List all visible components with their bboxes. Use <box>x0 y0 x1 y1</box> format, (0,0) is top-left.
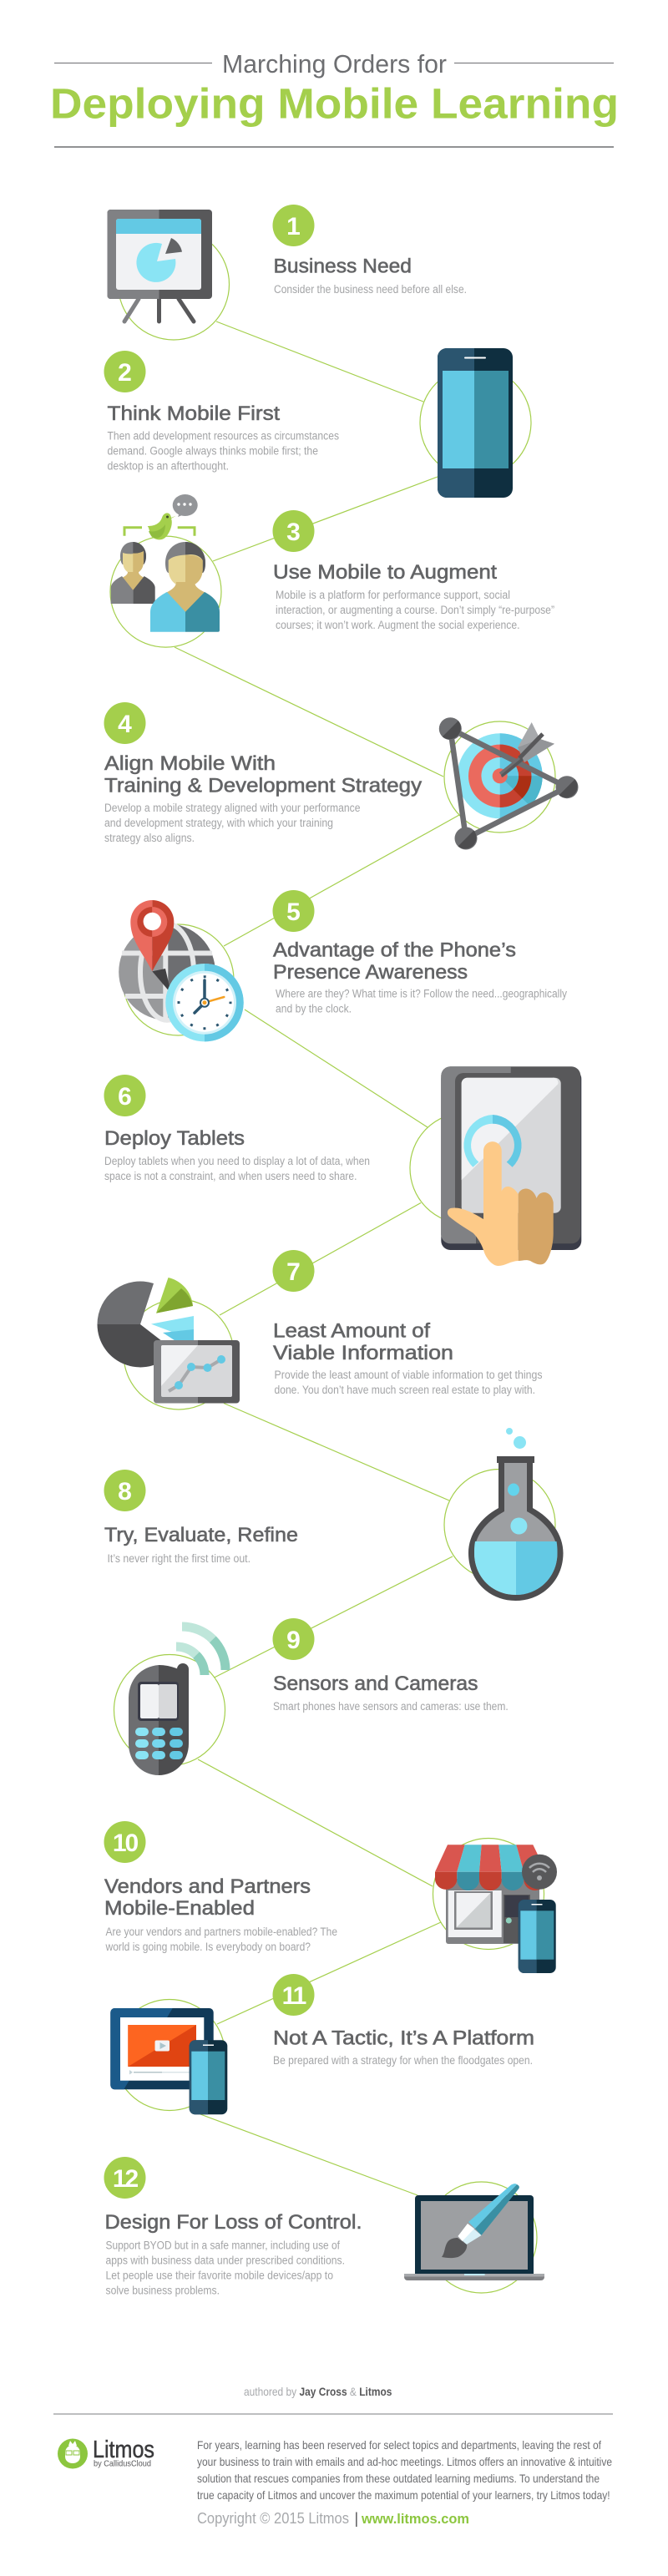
heading: Use Mobile to Augment <box>273 561 497 584</box>
icon: people and bird <box>110 494 221 647</box>
icon: presentation board <box>107 210 229 340</box>
icon: globe, pin and clock <box>119 900 244 1041</box>
description: Be prepared with a strategy for when the floodgates open. <box>273 2054 533 2067</box>
number 2: 2 <box>118 359 132 387</box>
description: Support BYOD but in a safe manner, including use of <box>105 2239 340 2251</box>
footer paragraph: true capacity of Litmos and uncover the maximum potential of your learners, try Litmos today! <box>197 2488 610 2502</box>
heading: Not A Tactic, It’s A Platform <box>273 2027 534 2050</box>
footer logo: litmos: by CallidusCloud <box>94 2458 151 2468</box>
item 5: presence awareness <box>119 890 567 1041</box>
description: demand. Google always thinks mobile first; the <box>107 444 318 458</box>
heading: Try, Evaluate, Refine <box>104 1524 298 1546</box>
description: desktop is an afterthought. <box>107 459 229 473</box>
number 10: 10 <box>113 1830 138 1857</box>
description: done. You don’t have much screen real estate to play with. <box>274 1384 535 1396</box>
copyright and website <box>197 2510 469 2527</box>
item 11: not a tactic <box>110 1974 534 2114</box>
item 2: think mobile first <box>104 348 531 498</box>
heading: Align Mobile With <box>104 752 276 775</box>
heading: Deploy Tablets <box>104 1127 245 1150</box>
number 1: 1 <box>286 213 301 240</box>
footer logo: litmos <box>58 2437 154 2468</box>
item 8: try, evaluate, refine <box>104 1428 563 1601</box>
number 5: 5 <box>286 898 301 926</box>
description <box>276 589 554 631</box>
item 9: sensors and cameras <box>114 1618 509 1775</box>
description: apps with business data under prescribed conditions. <box>105 2255 345 2266</box>
footer paragraph: solution that rescues companies from these outdated learning mediums. To understand the <box>197 2472 600 2485</box>
number 12 <box>104 2157 145 2199</box>
number 8: 8 <box>118 1478 132 1506</box>
description: Develop a mobile strategy aligned with your performance <box>104 802 361 814</box>
number 3: 3 <box>286 519 301 546</box>
title: deploying mobile learning: Deploying Mobile Learning <box>50 80 619 127</box>
item 6: deploy tablets <box>104 1066 581 1266</box>
description: Then add development resources as circumstances <box>107 429 339 443</box>
icon: laptop and brush <box>404 2182 544 2293</box>
heading: Business Need <box>274 256 412 277</box>
description: solve business problems. <box>105 2285 220 2296</box>
copyright and website: Copyright © 2015 Litmos <box>197 2510 349 2527</box>
heading <box>104 752 423 797</box>
icon: pie chart and mini tablet <box>97 1278 240 1409</box>
item 1: business need <box>107 205 467 340</box>
heading: Viable Information <box>273 1342 453 1364</box>
number 3 <box>272 510 314 552</box>
number 2 <box>104 351 145 392</box>
number 12: 12 <box>113 2165 138 2193</box>
description <box>107 429 339 473</box>
number 11 <box>272 1974 314 2016</box>
icon: tablet with hand <box>410 1066 581 1266</box>
footer logo: litmos: Litmos <box>93 2437 154 2463</box>
footer paragraph: your business to train with emails and ad-hoc meetings. Litmos offers an innovative & intuitive <box>197 2455 612 2468</box>
heading <box>273 939 516 984</box>
description <box>104 802 361 844</box>
description <box>104 1155 370 1182</box>
heading: Least Amount of <box>273 1319 430 1342</box>
heading: Sensors and Cameras <box>273 1673 478 1695</box>
description: Mobile is a platform for performance support, social <box>276 589 510 601</box>
number 11: 11 <box>282 1982 306 2010</box>
description: courses; it won’t work. Augment the social experience. <box>276 619 519 631</box>
description <box>274 1369 543 1396</box>
item 4: align mobile <box>104 702 578 850</box>
description: It’s never right the first time out. <box>107 1552 250 1565</box>
number 6 <box>104 1075 145 1116</box>
number 1 <box>272 205 314 246</box>
authored by credit: authored by Jay Cross & Litmos <box>244 2385 392 2398</box>
description: and development strategy, with which your training <box>104 817 333 829</box>
description: Provide the least amount of viable information to get things <box>274 1369 543 1381</box>
item 10: vendors and partners <box>104 1821 557 1973</box>
number 4 <box>104 702 145 744</box>
icon: target and arrow <box>439 717 578 850</box>
heading: Advantage of the Phone’s <box>273 939 516 962</box>
heading: Design For Loss of Control. <box>105 2211 362 2234</box>
number 10 <box>104 1821 145 1863</box>
description: interaction, or augmenting a course. Don’t simply “re-purpose” <box>276 604 554 616</box>
number 6: 6 <box>118 1083 132 1111</box>
description: world is going mobile. Is everybody on board? <box>105 1941 311 1953</box>
number 7 <box>272 1250 314 1292</box>
heading: Mobile-Enabled <box>104 1897 255 1920</box>
heading <box>273 1319 453 1364</box>
heading: Vendors and Partners <box>104 1875 311 1898</box>
number 9 <box>272 1618 314 1660</box>
description <box>276 987 567 1015</box>
icon: monitor and phone <box>110 1999 227 2114</box>
icon: smartphone <box>420 348 531 498</box>
number 7: 7 <box>286 1258 301 1286</box>
number 8 <box>104 1470 145 1511</box>
number 9: 9 <box>286 1627 301 1654</box>
icon: flask <box>444 1428 563 1601</box>
footer paragraph <box>197 2438 612 2502</box>
connector lines <box>175 321 459 2195</box>
description: Smart phones have sensors and cameras: use them. <box>273 1700 509 1713</box>
footer paragraph: For years, learning has been reserved for select topics and departments, leaving the rest of <box>197 2438 601 2452</box>
description <box>105 1926 337 1953</box>
item 3: use mobile to augment <box>110 494 554 647</box>
icon: cell phone with signal <box>114 1627 225 1775</box>
description: Deploy tablets when you need to display a lot of data, when <box>104 1155 370 1167</box>
description <box>105 2239 345 2296</box>
description: Where are they? What time is it? Follow the need...geographically <box>276 987 567 1000</box>
heading: Training & Development Strategy <box>104 775 423 797</box>
header <box>50 49 619 147</box>
description: Consider the business need before all else. <box>274 283 467 296</box>
icon: shop with wifi and phone <box>433 1839 557 1973</box>
description: Let people use their favorite mobile devices/app to <box>105 2270 333 2281</box>
copyright and website: www.litmos.com <box>361 2511 469 2527</box>
description: strategy also aligns. <box>104 832 195 844</box>
heading <box>104 1875 311 1920</box>
number 5 <box>272 890 314 932</box>
description: Are your vendors and partners mobile-enabled? The <box>105 1926 337 1938</box>
item 7: least amount of viable information <box>97 1250 543 1409</box>
number 4: 4 <box>118 711 132 738</box>
heading: Presence Awareness <box>273 961 468 984</box>
heading: Think Mobile First <box>107 402 280 425</box>
title: marching orders: Marching Orders for <box>222 49 447 78</box>
item 12: design for loss of control <box>104 2157 544 2296</box>
description: and by the clock. <box>276 1002 352 1015</box>
copyright and website: | <box>354 2510 358 2527</box>
description: space is not a constraint, and when users need to share. <box>104 1170 357 1182</box>
